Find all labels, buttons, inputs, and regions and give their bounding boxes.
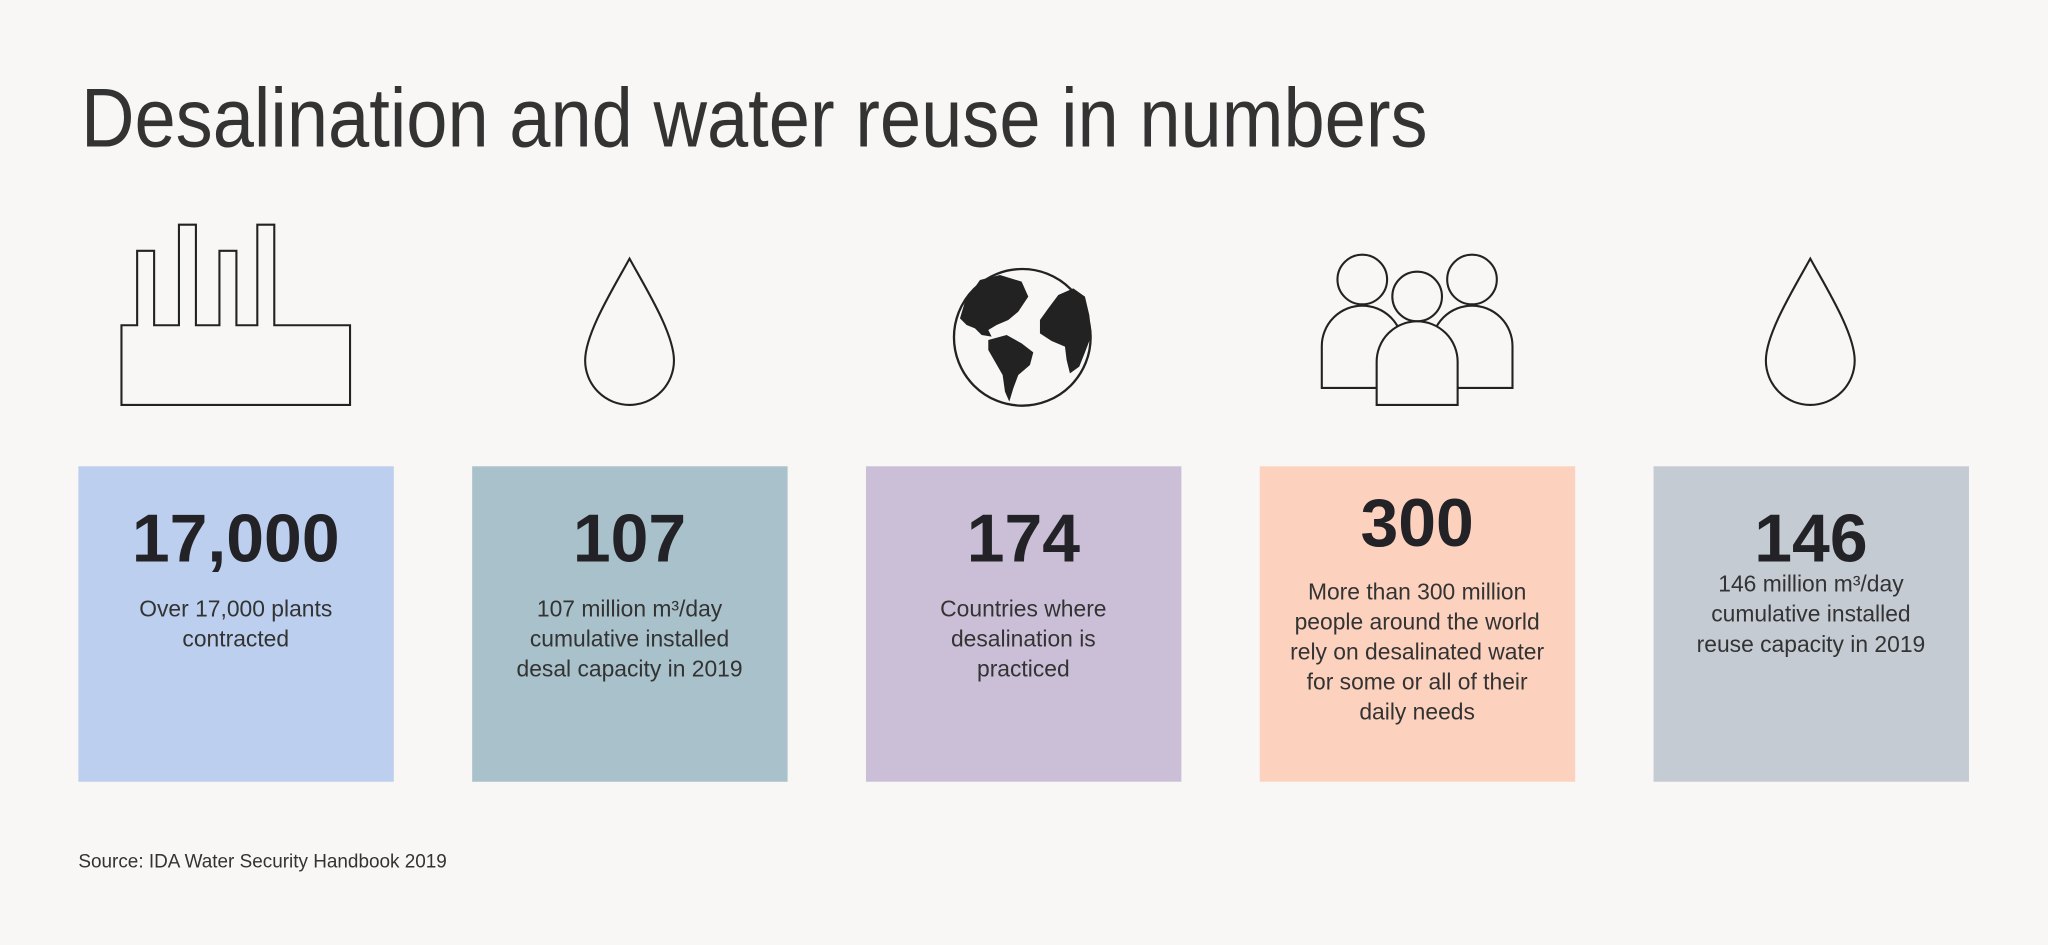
panel: people: 300: [1360, 486, 1474, 561]
panel: countries: [866, 466, 1181, 782]
panel: reuse capacity: 146 million m³/day: [1718, 571, 1904, 597]
panel: people: rely on desalinated water: [1290, 639, 1545, 665]
panel: plants: Over 17,000 plants: [139, 596, 332, 622]
panel: countries: 174: [967, 502, 1080, 577]
panel: plants: [78, 466, 394, 782]
panel: desal capacity: [472, 466, 788, 782]
title: Desalination and water reuse in numbers: [81, 70, 1428, 164]
source: Source: IDA Water Security Handbook 2019: [78, 851, 447, 872]
panel: countries: Countries where: [940, 596, 1107, 622]
icon: water drop: [585, 259, 674, 405]
panel: countries: desalination is: [951, 626, 1096, 652]
panel: reuse capacity: reuse capacity in 2019: [1697, 631, 1925, 657]
panel: people: daily needs: [1359, 699, 1475, 725]
icon: globe: [954, 269, 1092, 406]
panel: countries: practiced: [977, 656, 1070, 682]
panel: plants: contracted: [182, 626, 289, 652]
panel: desal capacity: 107 million m³/day: [537, 596, 723, 622]
panel: plants: 17,000: [132, 502, 340, 577]
icon: people: [1322, 255, 1512, 405]
panel: people: people around the world: [1295, 609, 1540, 635]
panel: reuse capacity: cumulative installed: [1711, 601, 1911, 627]
panel: people: More than 300 million: [1308, 579, 1526, 605]
panel: desal capacity: cumulative installed: [530, 626, 729, 652]
panel: people: [1260, 466, 1575, 782]
panel: people: for some or all of their: [1307, 669, 1528, 695]
icon: factory: [121, 225, 350, 405]
panel: reuse capacity: 146: [1754, 502, 1868, 577]
panel: desal capacity: desal capacity in 2019: [517, 656, 743, 682]
panel: reuse capacity: [1654, 466, 1969, 782]
icon: water drop reuse: [1766, 259, 1855, 405]
panel: desal capacity: 107: [573, 502, 686, 577]
